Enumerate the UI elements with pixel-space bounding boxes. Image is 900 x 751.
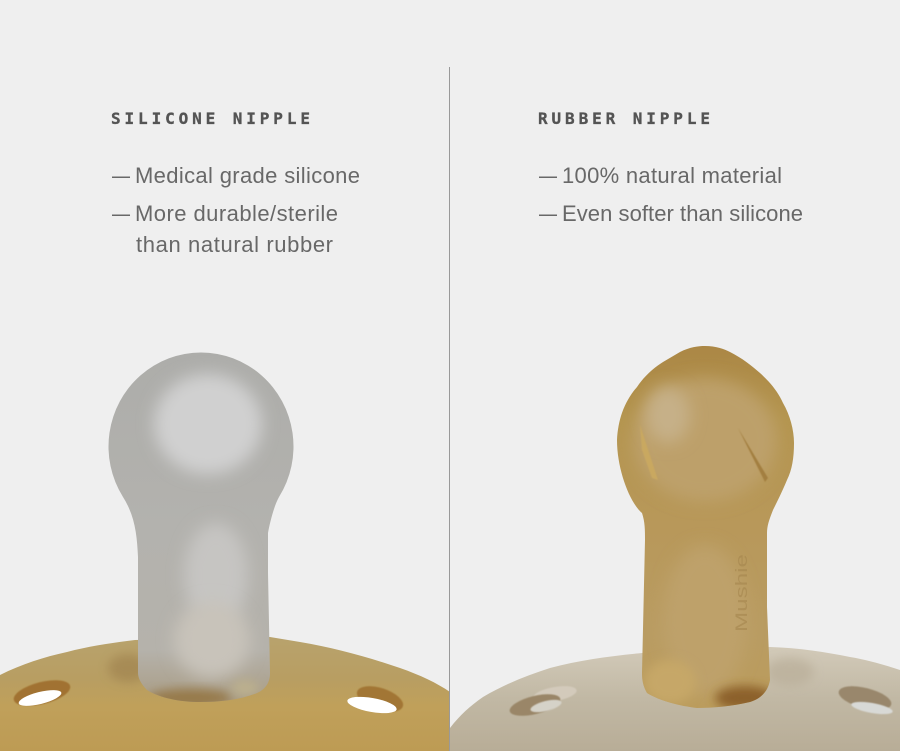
cream pacifier shield — [450, 647, 900, 751]
illustration: rubber pacifier — [450, 346, 900, 751]
left air hole — [11, 675, 73, 711]
panel: silicone nipple text — [111, 109, 360, 257]
text block: rubber bullet list: Even softer than silicone — [562, 201, 803, 226]
text block: silicone bullet list: — — [112, 201, 130, 226]
panel: rubber nipple text — [538, 109, 803, 226]
text block: silicone bullet list: — — [112, 163, 130, 188]
text block: rubber bullet list: 100% natural material — [562, 163, 782, 188]
illustration: silicone pacifier — [0, 352, 450, 751]
right air hole — [836, 682, 894, 717]
right air hole — [346, 681, 406, 717]
text block: silicone bullet list: than natural rubber — [136, 232, 333, 257]
divider line — [448, 67, 450, 751]
text block: rubber bullet list: — — [539, 163, 557, 188]
heading: silicone nipple: SILICONE NIPPLE — [111, 109, 310, 128]
left air hole — [508, 683, 578, 720]
text block: silicone bullet list: Medical grade silicone — [135, 163, 360, 188]
frosted silicone nipple — [109, 352, 294, 707]
amber rubber nipple — [617, 346, 794, 710]
text block: rubber bullet list — [539, 163, 803, 226]
text block: silicone bullet list — [112, 163, 360, 257]
text block: rubber bullet list: — — [539, 201, 557, 226]
mustard pacifier shield — [0, 637, 450, 751]
embossed brand mark: Mushie — [732, 554, 751, 632]
heading: rubber nipple: RUBBER NIPPLE — [538, 109, 710, 128]
text block: silicone bullet list: More durable/sterile — [135, 201, 338, 226]
